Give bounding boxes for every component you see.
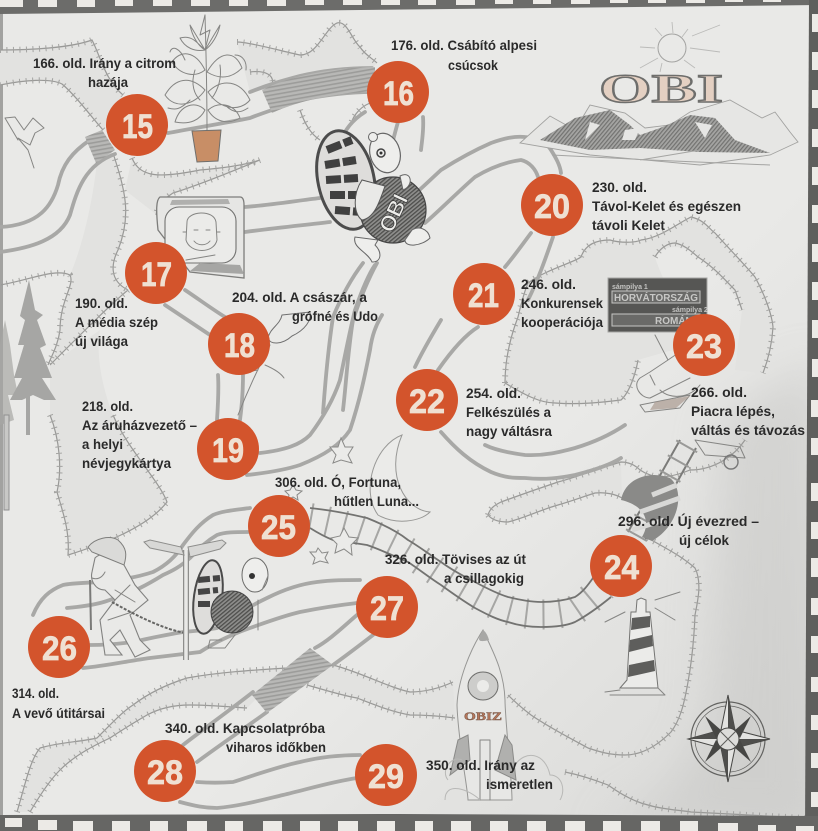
- chapter marker 27: [356, 576, 418, 638]
- chapter marker 23: 23: [686, 328, 722, 366]
- film strip border: top: [0, 0, 818, 14]
- label: chapter 16: [391, 37, 537, 73]
- chapter marker 25: 25: [261, 509, 296, 547]
- icon: road sign: HORVÁTORSZÁG: [614, 291, 698, 304]
- label: chapter 26: [12, 685, 105, 721]
- label: chapter 16: 176. old. Csábító alpesi: [391, 37, 537, 53]
- icon: gnome on rail cart: [637, 335, 745, 469]
- label: chapter 22: 254. old.: [466, 385, 521, 401]
- chapter marker 26: [28, 616, 90, 678]
- label: chapter 19: névjegykártya: [82, 455, 171, 471]
- chapter marker 29: 29: [368, 758, 404, 796]
- label: chapter 17: új világa: [75, 333, 128, 349]
- icon: mountains: [520, 100, 798, 165]
- chapter marker 24: 24: [604, 549, 639, 587]
- bridge: 15 to 16: [262, 67, 375, 113]
- label: chapter 17: A média szép: [75, 314, 158, 330]
- label: chapter 29: 350. old. Irány az: [426, 757, 535, 773]
- icon: road sign: sámpilya 2: [672, 307, 708, 314]
- chapter marker 28: 28: [147, 754, 183, 792]
- label: chapter 18: [232, 289, 378, 324]
- icon: rocket: OBIZ: [464, 709, 502, 723]
- icon: rocket: [445, 630, 563, 800]
- icon: mountain sketch left: [5, 117, 44, 168]
- icon: signpost: [144, 540, 226, 660]
- icon: stars: [285, 438, 358, 564]
- label: chapter 19: 218. old.: [82, 398, 133, 414]
- label: chapter 23: [691, 384, 805, 438]
- label: chapter 28: viharos időkben: [226, 739, 326, 755]
- label: chapter 22: nagy váltásra: [466, 423, 552, 439]
- chapter marker 17: 17: [141, 256, 172, 294]
- icon: sun: [640, 22, 720, 72]
- chapter marker 24: [590, 535, 652, 597]
- label: chapter 22: Felkészülés a: [466, 404, 551, 420]
- chapter marker 22: [396, 369, 458, 431]
- icon: moon: [370, 435, 430, 521]
- label: chapter 15: [33, 55, 176, 90]
- label: chapter 26: 314. old.: [12, 685, 59, 701]
- label: chapter 23: Piacra lépés,: [691, 403, 775, 419]
- chapter marker 21: 21: [468, 277, 499, 315]
- icon: road sign: ROMÁNIA: [655, 314, 703, 327]
- label: chapter 24: [618, 512, 759, 548]
- icon: rose: [238, 312, 310, 415]
- label: chapter 25: [275, 473, 419, 509]
- chapter marker 22: 22: [409, 383, 445, 421]
- film strip border: right: [805, 0, 818, 831]
- label: chapter 27: a csillagokig: [444, 570, 524, 586]
- railway from 24 to 25: [310, 508, 611, 627]
- icon: lighthouse: [605, 592, 680, 695]
- chapter marker 27: 27: [370, 590, 404, 628]
- icon: television: [157, 197, 244, 278]
- OBI logo: OBI: [599, 66, 723, 111]
- chapter marker 29: [355, 744, 417, 806]
- icon: turtle with OBI shell: OBI: [374, 190, 413, 236]
- chapter marker 19: [197, 418, 259, 480]
- label: chapter 27: 326. old. Tövises az út: [385, 551, 526, 567]
- chapter marker 19: 19: [212, 432, 244, 470]
- chapter marker 20: 20: [534, 188, 570, 226]
- label: chapter 21: 246. old.: [521, 276, 576, 292]
- label: chapter 28: [165, 720, 326, 755]
- label: chapter 20: [592, 179, 741, 233]
- label: chapter 15: 166. old. Irány a citrom: [33, 55, 176, 71]
- label: chapter 21: Konkurensek: [521, 295, 603, 311]
- icon: terracotta pot: [192, 130, 221, 162]
- label: chapter 19: [82, 398, 197, 471]
- label: chapter 29: ismeretlen: [486, 776, 553, 792]
- icon: compass rose: [688, 695, 770, 782]
- label: chapter 17: 190. old.: [75, 295, 128, 311]
- label: chapter 23: 266. old.: [691, 384, 747, 400]
- chapter marker 18: 18: [224, 327, 255, 365]
- icon: road sign: sámpilya 1: [612, 284, 648, 291]
- icon: road sign: [608, 278, 708, 332]
- chapter marker 20: [521, 174, 583, 236]
- label: chapter 23: váltás és távozás: [691, 422, 805, 438]
- label: chapter 20: Távol-Kelet és egészen: [592, 198, 741, 214]
- icon: fir trees: [0, 280, 56, 510]
- label: chapter 20: távoli Kelet: [592, 217, 665, 233]
- label: chapter 28: 340. old. Kapcsolatpróba: [165, 720, 325, 736]
- label: chapter 18: 204. old. A császár, a: [232, 289, 367, 305]
- chapter marker 16: 16: [383, 75, 414, 113]
- label: chapter 17: [75, 295, 158, 349]
- chapter marker 18: [208, 313, 270, 375]
- label: chapter 16: csúcsok: [448, 57, 498, 73]
- label: chapter 18: grófné és Udo: [292, 308, 378, 324]
- label: chapter 26: A vevő útitársai: [12, 705, 105, 721]
- chapter marker 16: [367, 61, 429, 123]
- chapter marker 21: [453, 263, 515, 325]
- label: chapter 24: 296. old. Új évezred –: [618, 512, 759, 529]
- label: chapter 27: [385, 551, 526, 586]
- bridge: 27 to 28: [252, 648, 333, 713]
- label: chapter 21: [521, 276, 603, 330]
- chapter marker 15: 15: [122, 108, 153, 146]
- railway from 23 to 24: [628, 440, 696, 540]
- label: chapter 25: hűtlen Luna...: [334, 493, 419, 509]
- label: chapter 19: a helyi: [82, 436, 123, 452]
- label: chapter 29: [426, 757, 553, 792]
- chapter marker 23: [673, 314, 735, 376]
- chapter marker 25: [248, 495, 310, 557]
- label: chapter 15: hazája: [88, 74, 128, 90]
- film strip border: bottom: [0, 814, 818, 831]
- icon: lemon plant in pot: [165, 15, 250, 162]
- label: chapter 19: Az áruházvezető –: [82, 417, 197, 433]
- label: chapter 25: 306. old. Ó, Fortuna,: [275, 473, 401, 490]
- label: chapter 24: új célok: [679, 532, 729, 548]
- label: chapter 22: [466, 385, 552, 439]
- chapter marker 15: [106, 94, 168, 156]
- icon: turtle with OBI shell: [308, 125, 430, 262]
- chapter marker 28: [134, 740, 196, 802]
- tunnel: [621, 475, 680, 541]
- icon: hiker with rope: [88, 538, 186, 657]
- chapter marker 26: 26: [42, 630, 77, 668]
- chapter marker 17: [125, 242, 187, 304]
- icon: turtle walking: [189, 558, 268, 648]
- label: chapter 21: kooperációja: [521, 314, 603, 330]
- bridge: near 15: [85, 130, 115, 163]
- winding roads: [0, 68, 625, 808]
- label: chapter 20: 230. old.: [592, 179, 647, 195]
